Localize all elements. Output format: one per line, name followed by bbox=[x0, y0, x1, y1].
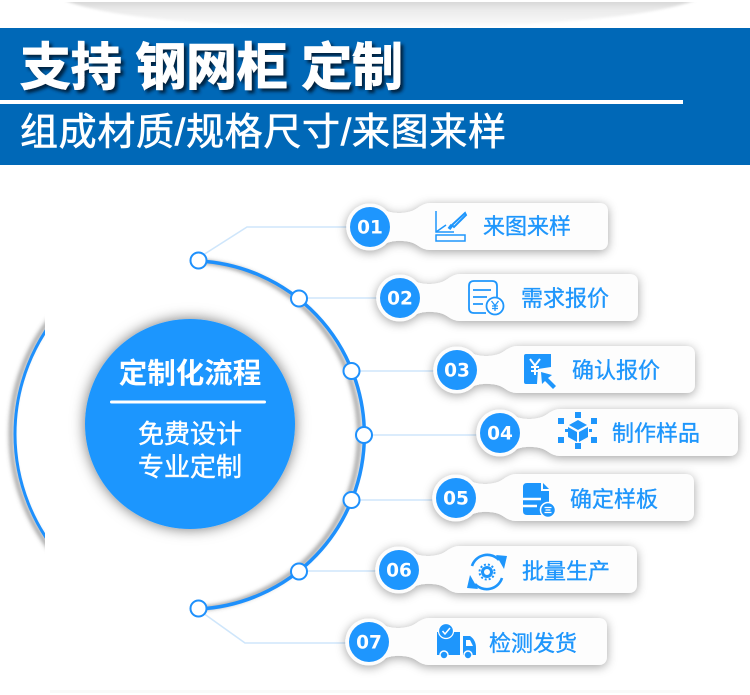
subtitle: 组成材质/规格尺寸/来图来样 bbox=[20, 112, 506, 154]
step 04: 04 bbox=[487, 424, 513, 444]
center circle bbox=[85, 319, 295, 529]
step 07: 07 bbox=[356, 632, 382, 654]
arc nodes bbox=[190, 252, 372, 616]
step 02: 02 bbox=[387, 288, 413, 310]
left arc bbox=[6, 318, 45, 550]
step 07: 检测发货 bbox=[489, 631, 577, 656]
step 03 bbox=[433, 346, 695, 393]
step 06: 06 bbox=[386, 560, 412, 582]
center text line 1: 免费设计 bbox=[138, 419, 242, 449]
step 04 bbox=[476, 409, 738, 456]
icon: ruler and brush bbox=[436, 211, 466, 241]
step 03: 03 bbox=[444, 360, 470, 382]
step 05: 05 bbox=[443, 488, 469, 510]
step 05: 确定样板 bbox=[570, 487, 658, 512]
step 07 bbox=[345, 618, 607, 665]
center divider bbox=[110, 400, 266, 404]
step 06 bbox=[375, 546, 637, 593]
icon: price confirm cursor bbox=[524, 354, 556, 389]
header divider bbox=[0, 100, 683, 104]
step 05 bbox=[432, 474, 694, 521]
step 02: 需求报价 bbox=[521, 286, 609, 311]
step 03: 确认报价 bbox=[572, 358, 660, 383]
icon: quotation document bbox=[469, 281, 504, 314]
center text line 2: 专业定制 bbox=[138, 452, 242, 482]
step 01 bbox=[346, 203, 608, 250]
connector lines bbox=[203, 227, 478, 643]
step 04: 制作样品 bbox=[612, 421, 700, 446]
icon: delivery truck bbox=[437, 624, 476, 659]
step 06: 批量生产 bbox=[522, 559, 610, 584]
right arc bbox=[194, 261, 364, 609]
top shadow decoration bbox=[67, 2, 692, 22]
center heading: 定制化流程 bbox=[119, 358, 261, 390]
icon: production cycle bbox=[467, 555, 507, 589]
icon: cube network bbox=[558, 412, 597, 449]
step 01: 来图来样 bbox=[483, 214, 571, 239]
faint bottom strip bbox=[50, 690, 680, 693]
icon: sample document bbox=[523, 483, 556, 518]
header band bbox=[0, 28, 750, 165]
step 02 bbox=[376, 274, 638, 321]
title: 支持 钢网柜 定制 bbox=[20, 39, 403, 96]
step 01: 01 bbox=[357, 218, 383, 238]
